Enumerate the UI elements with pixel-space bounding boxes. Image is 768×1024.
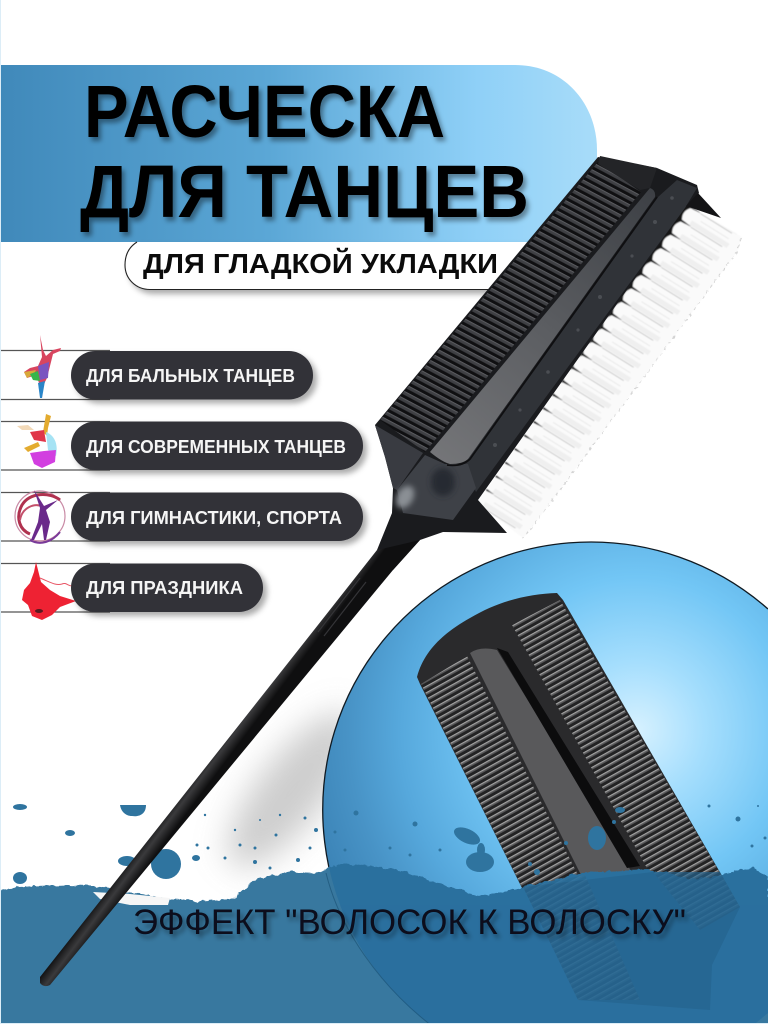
comb shoulder: [375, 425, 423, 490]
subtitle pill fill: [125, 242, 530, 290]
splash wave: [0, 863, 768, 960]
pill: modern: [71, 422, 363, 470]
icon: modern dancer: [17, 414, 57, 468]
subtitle pill: [125, 242, 530, 290]
junction highlight: [392, 483, 418, 511]
feature row: ballroom: [0, 335, 313, 400]
strip speckles: [493, 196, 674, 447]
dark channel: [497, 648, 640, 868]
pill: gymnastics: [71, 492, 363, 541]
feature row: holiday: [0, 562, 263, 620]
brush strip: [463, 180, 697, 492]
submerged comb teeth: [523, 875, 640, 1000]
centre bar: [470, 648, 630, 874]
label: modern: ДЛЯ СОВРЕМЕННЫХ ТАНЦЕВ: [86, 436, 346, 457]
splash inside disc: [329, 864, 768, 1023]
junction dark spot: [431, 468, 455, 496]
main comb: [40, 156, 742, 986]
disc outline: [323, 542, 768, 1024]
comb teeth: [380, 162, 641, 452]
label: holiday: ДЛЯ ПРАЗДНИКА: [86, 577, 243, 598]
zoom disc: [322, 541, 768, 897]
bristle block: [477, 204, 742, 538]
title line two: ДЛЯ ТАНЦЕВ: [80, 150, 529, 233]
pill: holiday: [71, 564, 263, 612]
spine gap line: [447, 197, 657, 465]
magnified comb: [417, 593, 722, 888]
row lines: [0, 350, 110, 400]
magnified comb body: [417, 593, 722, 888]
row lines: [0, 422, 110, 470]
label: gymnastics: ДЛЯ ГИМНАСТИКИ, СПОРТА: [86, 507, 342, 528]
row lines: [0, 492, 110, 541]
submerged comb ghost: [523, 872, 740, 1010]
bristle wedge at top: [686, 193, 721, 218]
subtitle pill edge: [125, 242, 500, 290]
left teeth: [421, 656, 578, 888]
icon: gymnast with ribbon: [15, 490, 65, 543]
handle grip ridges: [318, 578, 366, 636]
lower tint in disc: [369, 910, 768, 1023]
handle: [40, 540, 420, 986]
feature row: gymnastics: [0, 490, 363, 543]
feature row: modern: [0, 414, 363, 470]
icon: ballroom dancer: [24, 335, 61, 398]
junction panel: [397, 455, 476, 520]
row lines: [0, 564, 110, 612]
pill: ballroom: [71, 351, 313, 400]
bristle fringe: [522, 238, 741, 538]
paint splash: [0, 804, 768, 1024]
icon: red dress dancer: [22, 562, 76, 620]
splash lower fill: [0, 905, 768, 1023]
disc rim under water: [326, 873, 429, 1024]
soft shadow behind handle and disc: [207, 694, 377, 886]
disc fill: [323, 542, 768, 1024]
bristles: [477, 204, 742, 538]
grey spine bar: [430, 188, 655, 464]
subtitle: ДЛЯ ГЛАДКОЙ УКЛАДКИ: [143, 247, 498, 279]
bottom caption: ЭФФЕКТ "ВОЛОСОК К ВОЛОСКУ": [133, 903, 686, 942]
title line one: РАСЧЕСКА: [84, 70, 445, 153]
wave tint in disc: [329, 864, 768, 905]
comb top cap: [598, 156, 657, 190]
label: ballroom: ДЛЯ БАЛЬНЫХ ТАНЦЕВ: [86, 365, 295, 386]
submerged comb teeth right: [653, 872, 740, 930]
title: [80, 70, 529, 233]
header banner: [0, 65, 597, 242]
comb head silhouette: [375, 157, 699, 570]
white streaks in splash: [93, 892, 170, 905]
right teeth: [512, 600, 721, 880]
splash blobs: [13, 804, 766, 884]
